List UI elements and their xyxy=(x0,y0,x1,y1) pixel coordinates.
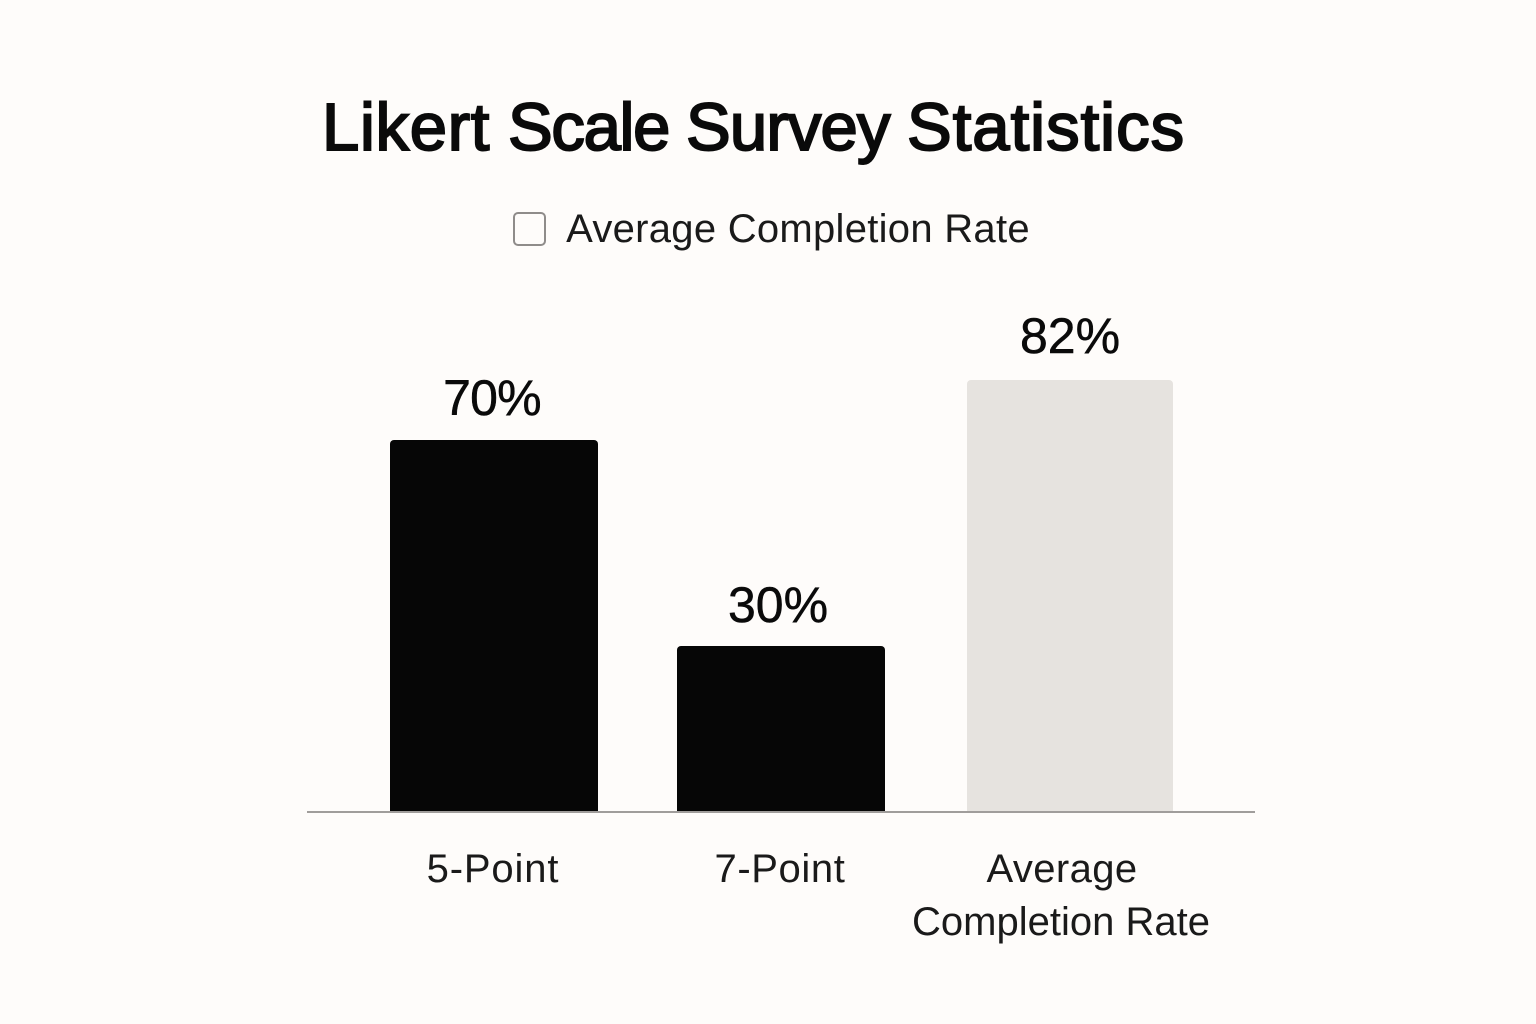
category label: 7-Point: 7-Point xyxy=(715,847,845,891)
title: Survey xyxy=(686,90,890,165)
axis line xyxy=(307,811,1255,813)
legend xyxy=(513,207,1030,251)
category label: 5-Point: 5-Point xyxy=(427,847,559,891)
value: 70%: 70% xyxy=(443,370,541,426)
bar: Average Completion Rate xyxy=(967,380,1173,812)
bar chart xyxy=(307,308,1255,944)
title xyxy=(322,90,1185,165)
title: Likert xyxy=(322,90,490,165)
category label: Average Completion Rate xyxy=(912,847,1210,944)
value: 30%: 30% xyxy=(728,577,828,633)
value: 82%: 82% xyxy=(1020,308,1120,364)
title: Statistics xyxy=(907,90,1185,165)
category label: Average Completion Rate: Average xyxy=(986,847,1138,891)
legend label: Average Completion Rate xyxy=(566,207,1030,251)
bar: 7-Point xyxy=(677,646,885,812)
title: Scale xyxy=(508,90,669,165)
legend swatch xyxy=(513,212,546,246)
category label: Average Completion Rate: Completion Rate xyxy=(912,900,1210,944)
bar: 5-Point xyxy=(390,440,598,812)
